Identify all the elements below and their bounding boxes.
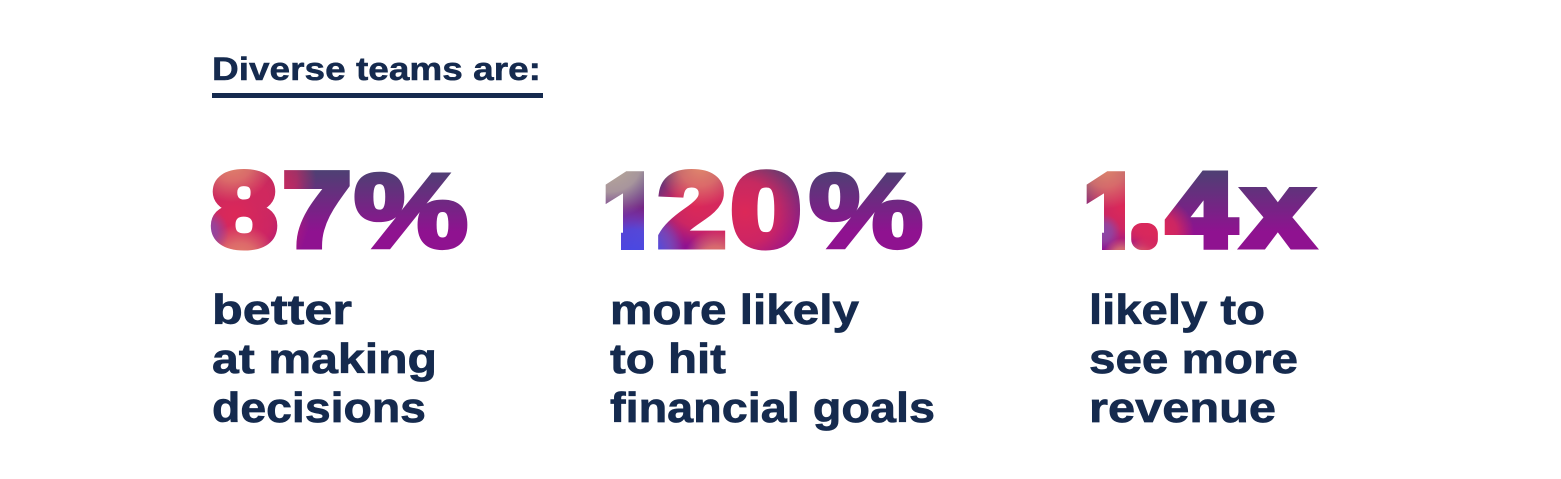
label: better at making decisions: better [212,286,352,333]
stat: 120% more likely to hit financial goals [602,152,935,431]
number: 120% [606,169,922,250]
label: better at making decisions [212,286,437,431]
number: 87% [211,152,468,270]
label: likely to see more revenue [1089,286,1298,431]
number: 120%: 0 [731,152,801,269]
heading [212,51,543,98]
label: more likely to hit financial goals: to hit [610,335,726,382]
number: 87%: 8 [211,152,277,269]
number: 1.4x: 4 [1167,152,1236,269]
stat: 1.4x likely to see more revenue [1083,152,1312,431]
label: likely to see more revenue: likely to [1089,286,1265,333]
label: more likely to hit financial goals [610,286,935,431]
number: 87%: 7 [283,152,351,269]
label: likely to see more revenue: revenue [1089,384,1276,431]
number: 1.4x: . [1139,204,1150,248]
number: 120%: 1 [602,153,660,270]
heading: Diverse teams are: [212,51,541,87]
number: 120%: % [809,153,923,270]
number: 87%: % [354,153,468,270]
number: 1.4x: 1 [1083,153,1141,270]
number: 1.4x: x [1244,152,1312,269]
label: better at making decisions: at making [212,335,437,382]
number: 1.4x [1086,170,1319,250]
stat: 87% better at making decisions [211,152,468,431]
label: more likely to hit financial goals: more likely [610,286,860,333]
label: better at making decisions: decisions [212,384,426,431]
label: likely to see more revenue: see more [1089,335,1298,382]
label: more likely to hit financial goals: financial goals [610,384,935,431]
number: 120%: 2 [658,152,726,269]
